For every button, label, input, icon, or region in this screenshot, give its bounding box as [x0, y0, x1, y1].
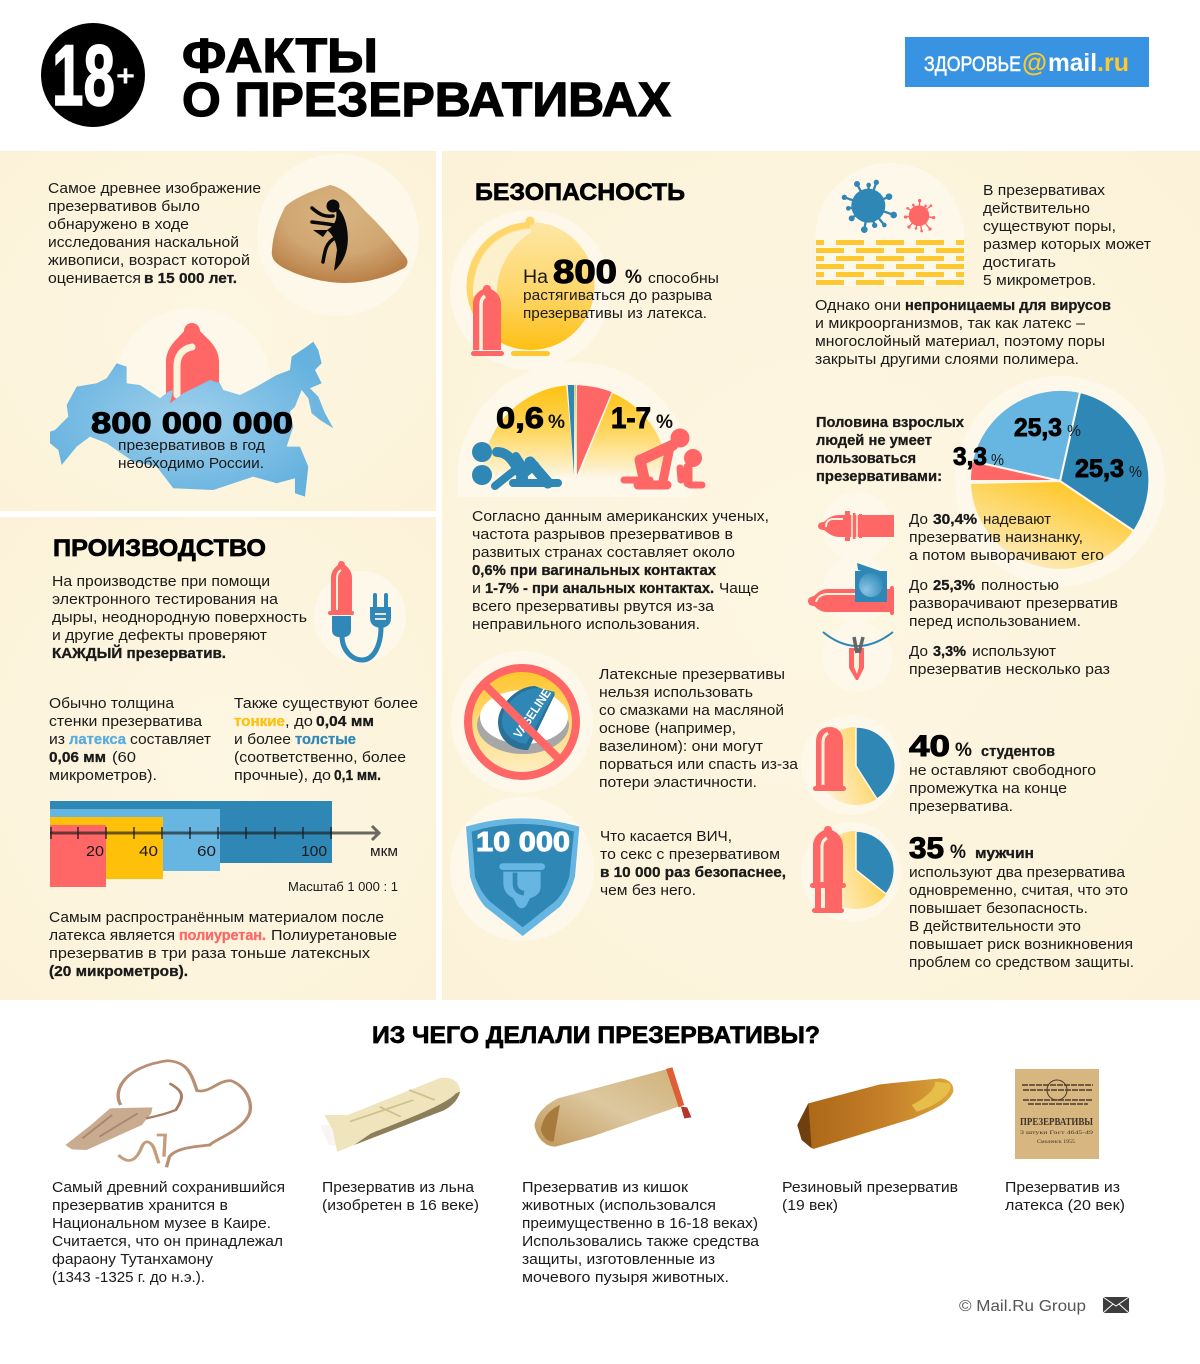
section: materials	[52, 1022, 1125, 1286]
text: inside out	[909, 512, 1104, 564]
chart: thickness scale: 60	[197, 844, 216, 860]
text: unrolled	[909, 578, 1118, 630]
text: polyurethane: Самым распространённым материалом после	[49, 910, 384, 926]
text: reuse: используют	[972, 644, 1056, 660]
text: HIV: в 10 000 раз безопаснее,	[600, 865, 786, 881]
logo: zdorovye mail.ru: ЗДОРОВЬЕ	[924, 53, 1021, 76]
text: oldest image: исследования наскальной	[48, 235, 239, 251]
text: oil lubricants: основе (например,	[599, 721, 736, 737]
heading: production: ПРОИЗВОДСТВО	[53, 535, 266, 562]
text: break rates: и	[472, 581, 481, 597]
text: thin and thick	[234, 696, 418, 784]
text: testing	[52, 574, 307, 662]
text: break rates: неправильного использования.	[472, 617, 700, 633]
text: inside out: 30,4%	[933, 512, 977, 528]
chart: misuse pie: 3,3	[953, 443, 987, 471]
text: impermeable: Однако они	[815, 298, 901, 314]
photo: intestine condom	[534, 1067, 691, 1147]
icon: cave painting rock	[257, 154, 419, 316]
text: polyurethane	[49, 910, 397, 980]
text: polyurethane: полиуретан.	[179, 928, 266, 944]
heading: what condoms were made of: ИЗ ЧЕГО ДЕЛАЛИ ПРЕЗЕРВАТИВЫ?	[372, 1022, 820, 1049]
text: half of adults: презервативами:	[816, 469, 942, 485]
text: pores: размер которых может	[983, 237, 1151, 253]
text: oil lubricants: порваться или спасть из-за	[599, 757, 799, 773]
text: 800 percent	[523, 253, 719, 322]
text: wall thickness: (60	[112, 750, 136, 766]
text: oil lubricants: потери эластичности.	[599, 775, 757, 791]
text: oil lubricants: нельзя использовать	[599, 685, 753, 701]
text: unrolled: 25,3%	[933, 578, 975, 594]
text: oil lubricants: со смазками на масляной	[599, 703, 784, 719]
text: 40 percent students: презерватива.	[909, 799, 1013, 815]
photo: latex condom packet	[1015, 1069, 1099, 1159]
chart: break rates half pie	[457, 362, 706, 497]
logo: zdorovye mail.ru: @	[1022, 47, 1047, 77]
text: linen	[322, 1180, 479, 1214]
text: oldest condom: Считается, что он принадлежал	[52, 1234, 283, 1250]
text: HIV: то секс с презервативом	[600, 847, 780, 863]
header: age badge 18+: +	[116, 60, 135, 93]
icon: 40 percent pie	[801, 715, 901, 815]
text: HIV	[600, 829, 786, 899]
text: break rates: 1-7% - при анальных контактах.	[485, 581, 714, 597]
panel: production	[0, 517, 436, 1000]
icon: viruses and latex layers	[815, 163, 964, 286]
text: oldest condom: Самый древний сохранившийся	[52, 1180, 285, 1196]
stat: 800 000 000	[91, 407, 293, 472]
text: thin and thick: толстые	[295, 732, 356, 748]
title: О ПРЕЗЕРВАТИВАХ	[182, 74, 671, 127]
text: thin and thick: , до	[285, 714, 313, 730]
text: 800 percent: растягиваться до разрыва	[523, 288, 713, 304]
text: thin and thick: и более	[234, 732, 291, 748]
text: wall thickness: Обычно толщина	[49, 696, 175, 712]
text: 40 percent students	[909, 730, 1096, 815]
text: intestines: Презерватив из кишок	[522, 1180, 689, 1196]
text: 800 percent: %	[625, 267, 642, 288]
chart: break rates half pie: 0,6	[496, 402, 544, 435]
map of Russia with condom	[50, 308, 333, 497]
text: wall thickness: из	[49, 732, 65, 748]
chart: thickness scale: 100	[301, 844, 327, 860]
text: inside out: презерватив наизнанку,	[909, 530, 1083, 546]
text: polyurethane: латекса является	[49, 928, 175, 944]
text: oil lubricants	[599, 667, 799, 791]
text: 800 percent: На	[523, 267, 548, 288]
text: 800 percent: 800	[553, 253, 617, 290]
text: rubber	[782, 1180, 958, 1214]
text: inside out: надевают	[983, 512, 1051, 528]
text: oil lubricants: вазелином): они могут	[599, 739, 763, 755]
text: testing: КАЖДЫЙ презерватив.	[52, 644, 226, 662]
title	[182, 30, 671, 127]
icon: 35 percent pie	[801, 822, 901, 922]
text: oldest image: обнаружено в ходе	[48, 217, 189, 233]
icon: electric tester	[314, 561, 406, 663]
text: 40 percent students: студентов	[981, 744, 1055, 760]
text: HIV: Что касается ВИЧ,	[600, 829, 732, 845]
text: oldest condom: Национальном музее в Каире.	[52, 1216, 271, 1232]
text: 35 percent men	[909, 832, 1134, 971]
text: latex	[1005, 1180, 1125, 1214]
chart: thickness scale: Масштаб 1 000 : 1	[288, 879, 398, 894]
text: 40 percent students: промежутка на конце	[909, 781, 1067, 797]
chart: misuse pie: 25,3	[1075, 455, 1124, 483]
text: break rates: Согласно данным американских ученых,	[472, 509, 769, 525]
chart: thickness scale: 40	[139, 844, 158, 860]
stat: 800 000 000: презервативов в год	[118, 438, 266, 454]
stat: 800 000 000: необходимо России.	[118, 456, 264, 472]
text: intestines: мочевого пузыря животных.	[522, 1270, 729, 1286]
text: oldest condom: презерватив хранится в	[52, 1198, 228, 1214]
text: latex: Презерватив из	[1005, 1180, 1120, 1196]
text: break rates: частота разрывов презервативов в	[472, 527, 733, 543]
panel: history	[0, 151, 436, 511]
text: impermeable: непроницаемы для вирусов	[905, 298, 1111, 314]
text: oldest image: живописи, возраст которой	[48, 253, 250, 269]
text: thin and thick: 0,1 мм.	[334, 768, 381, 784]
text: 35 percent men: повышает безопасность.	[909, 901, 1088, 917]
text: reuse: презерватив несколько раз	[909, 662, 1110, 678]
text: 40 percent students: %	[955, 740, 972, 761]
text: thin and thick: Также существуют более	[234, 696, 418, 712]
text: linen: (изобретен в 16 веке)	[322, 1198, 479, 1214]
icon: blue couple	[472, 442, 558, 486]
text: oldest image: Самое древнее изображение	[48, 181, 261, 197]
icon: red couple	[624, 428, 702, 485]
text: 800 percent: способны	[648, 271, 719, 287]
text: wall thickness: стенки презерватива	[49, 714, 203, 730]
text: linen: Презерватив из льна	[322, 1180, 475, 1196]
icon: drying on a line	[822, 622, 893, 692]
logo: zdorovye mail.ru: mail	[1048, 49, 1097, 77]
icon: balloon condom	[450, 210, 610, 370]
icon: no vaseline	[451, 651, 593, 793]
text: oldest image	[48, 181, 261, 287]
text: break rates: развитых странах составляет около	[472, 545, 735, 561]
text: inside out: До	[909, 512, 928, 528]
text: break rates	[472, 509, 769, 633]
text: thin and thick: 0,04 мм	[316, 714, 374, 730]
text: pores: достигать	[983, 255, 1056, 271]
chart: thickness scale: мкм	[370, 844, 398, 860]
text: latex: латекса (20 век)	[1005, 1198, 1125, 1214]
text: reuse: 3,3%	[933, 644, 966, 660]
text: 35 percent men: В действительности это	[909, 919, 1081, 935]
photo: latex condom packet: 3 штуки Гост 4645-49	[1020, 1131, 1094, 1136]
text: 800 percent: презервативы из латекса.	[523, 306, 707, 322]
text: wall thickness: составляет	[130, 732, 211, 748]
text: pores: существуют поры,	[983, 219, 1116, 235]
text: thin and thick: тонкие	[234, 714, 285, 730]
text: unrolled: До	[909, 578, 928, 594]
chart: thickness scale: 20	[86, 844, 104, 860]
text: half of adults: пользоваться	[816, 451, 916, 467]
panel: safety	[442, 151, 1200, 1000]
text: impermeable: закрыты другими слоями полимера.	[815, 352, 1079, 368]
text: intestines: животных (использовался	[522, 1198, 716, 1214]
chart: misuse pie: %	[991, 452, 1004, 469]
text: 35 percent men: мужчин	[975, 846, 1034, 862]
heading: safety: БЕЗОПАСНОСТЬ	[475, 179, 685, 206]
footer: copyright: © Mail.Ru Group	[959, 1298, 1086, 1315]
icon: unrolled before use	[808, 555, 894, 623]
stat: 800 000 000: 800 000 000	[91, 407, 293, 440]
icon: shield 10 000	[450, 797, 594, 941]
text: intestines: преимущественно в 16-18 веках)	[522, 1216, 758, 1232]
text: polyurethane: презерватив в три раза тоньше латексных	[49, 946, 371, 962]
text: oldest condom: фараону Тутанхамону	[52, 1252, 214, 1268]
text: reuse: До	[909, 644, 928, 660]
text: half of adults	[816, 415, 964, 485]
text: rubber: (19 век)	[782, 1198, 838, 1214]
text: thin and thick: прочные), до	[234, 768, 331, 784]
text: testing: На производстве при помощи	[52, 574, 270, 590]
text: impermeable: и микроорганизмов, так как латекс –	[815, 316, 1086, 332]
text: 40 percent students: 40	[909, 730, 950, 763]
logo: zdorovye mail.ru	[905, 37, 1149, 87]
text: polyurethane: Полиуретановые	[271, 928, 397, 944]
text: pores: В презервативах	[983, 183, 1106, 199]
chart: misuse pie: %	[1129, 464, 1142, 481]
chart: thickness scale	[50, 801, 398, 894]
icon: inside out	[818, 492, 894, 560]
text: intestines: Использовались также средства	[522, 1234, 760, 1250]
text: intestines: защиты, изготовленные из	[522, 1252, 715, 1268]
text: wall thickness	[49, 696, 211, 784]
text: unrolled: перед использованием.	[909, 614, 1081, 630]
text: oldest condom	[52, 1180, 285, 1286]
text: HIV: чем без него.	[600, 883, 696, 899]
header: age badge 18+: 18	[52, 28, 115, 124]
text: polyurethane: (20 микрометров).	[49, 964, 188, 980]
text: testing: и другие дефекты проверяют	[52, 628, 267, 644]
title: ФАКТЫ	[182, 30, 378, 83]
chart: break rates half pie: %	[548, 412, 565, 433]
text: 35 percent men: используют два презерватива	[909, 865, 1126, 881]
chart: misuse pie: %	[1067, 423, 1081, 440]
text: 35 percent men: %	[950, 842, 966, 863]
text: testing: дыры, неоднородную поверхность	[52, 610, 307, 626]
text: oldest condom: (1343 -1325 г. до н.э.).	[52, 1270, 205, 1286]
text: oldest image: презервативов было	[48, 199, 200, 215]
chart: break rates half pie: 1-7	[611, 402, 651, 435]
text: pores: действительно	[983, 201, 1090, 217]
text: wall thickness: латекса	[69, 732, 127, 748]
text: 40 percent students: не оставляют свободного	[909, 763, 1096, 779]
text: half of adults: людей не умеет	[816, 433, 932, 449]
photo: rubber condom	[797, 1078, 953, 1149]
text: impermeable: многослойный материал, поэтому поры	[815, 334, 1105, 350]
logo: zdorovye mail.ru: .ru	[1097, 49, 1129, 77]
icon: envelope	[1103, 1297, 1129, 1313]
text: thin and thick: (соответственно, более	[234, 750, 406, 766]
text: inside out: а потом выворачивают его	[909, 548, 1104, 564]
chart: misuse pie: 25,3	[1014, 414, 1062, 442]
text: 35 percent men: 35	[909, 832, 944, 865]
text: half of adults: Половина взрослых	[816, 415, 964, 431]
photo: ancient condom	[65, 1061, 250, 1167]
text: break rates: Чаще	[719, 581, 759, 597]
text: intestines	[522, 1180, 760, 1286]
text: wall thickness: микрометров).	[49, 768, 157, 784]
text: break rates: всего презервативы рвутся из-за	[472, 599, 715, 615]
photo: latex condom packet: Смоленск 1955	[1037, 1140, 1076, 1145]
text: unrolled: полностью	[981, 578, 1059, 594]
text: oil lubricants: Латексные презервативы	[599, 667, 785, 683]
text: pores	[983, 183, 1151, 289]
text: pores: 5 микрометров.	[983, 273, 1096, 289]
text: rubber: Резиновый презерватив	[782, 1180, 958, 1196]
chart: break rates half pie: %	[656, 412, 673, 433]
text: 35 percent men: повышает риск возникновения	[909, 937, 1133, 953]
text: 35 percent men: одновременно, считая, что это	[909, 883, 1128, 899]
text: testing: электронного тестирования на	[52, 592, 279, 608]
text: oldest image: оценивается	[48, 271, 141, 287]
text: reuse	[909, 644, 1110, 678]
text: 35 percent men: проблем со средством защиты.	[909, 955, 1134, 971]
photo: latex condom packet: ПРЕЗЕРВАТИВЫ	[1020, 1117, 1093, 1128]
text: break rates: 0,6% при вагинальных контактах	[472, 563, 716, 579]
text: wall thickness: 0,06 мм	[49, 750, 106, 766]
photo: linen condom	[320, 1078, 460, 1152]
text: oldest image: в 15 000 лет.	[144, 271, 237, 287]
icon: no vaseline: VASELINE	[511, 686, 554, 741]
text: unrolled: разворачивают презерватив	[909, 596, 1118, 612]
text: impermeable	[815, 298, 1111, 368]
icon: shield 10 000: 10 000	[476, 826, 570, 857]
chart: misuse pie	[953, 376, 1165, 586]
